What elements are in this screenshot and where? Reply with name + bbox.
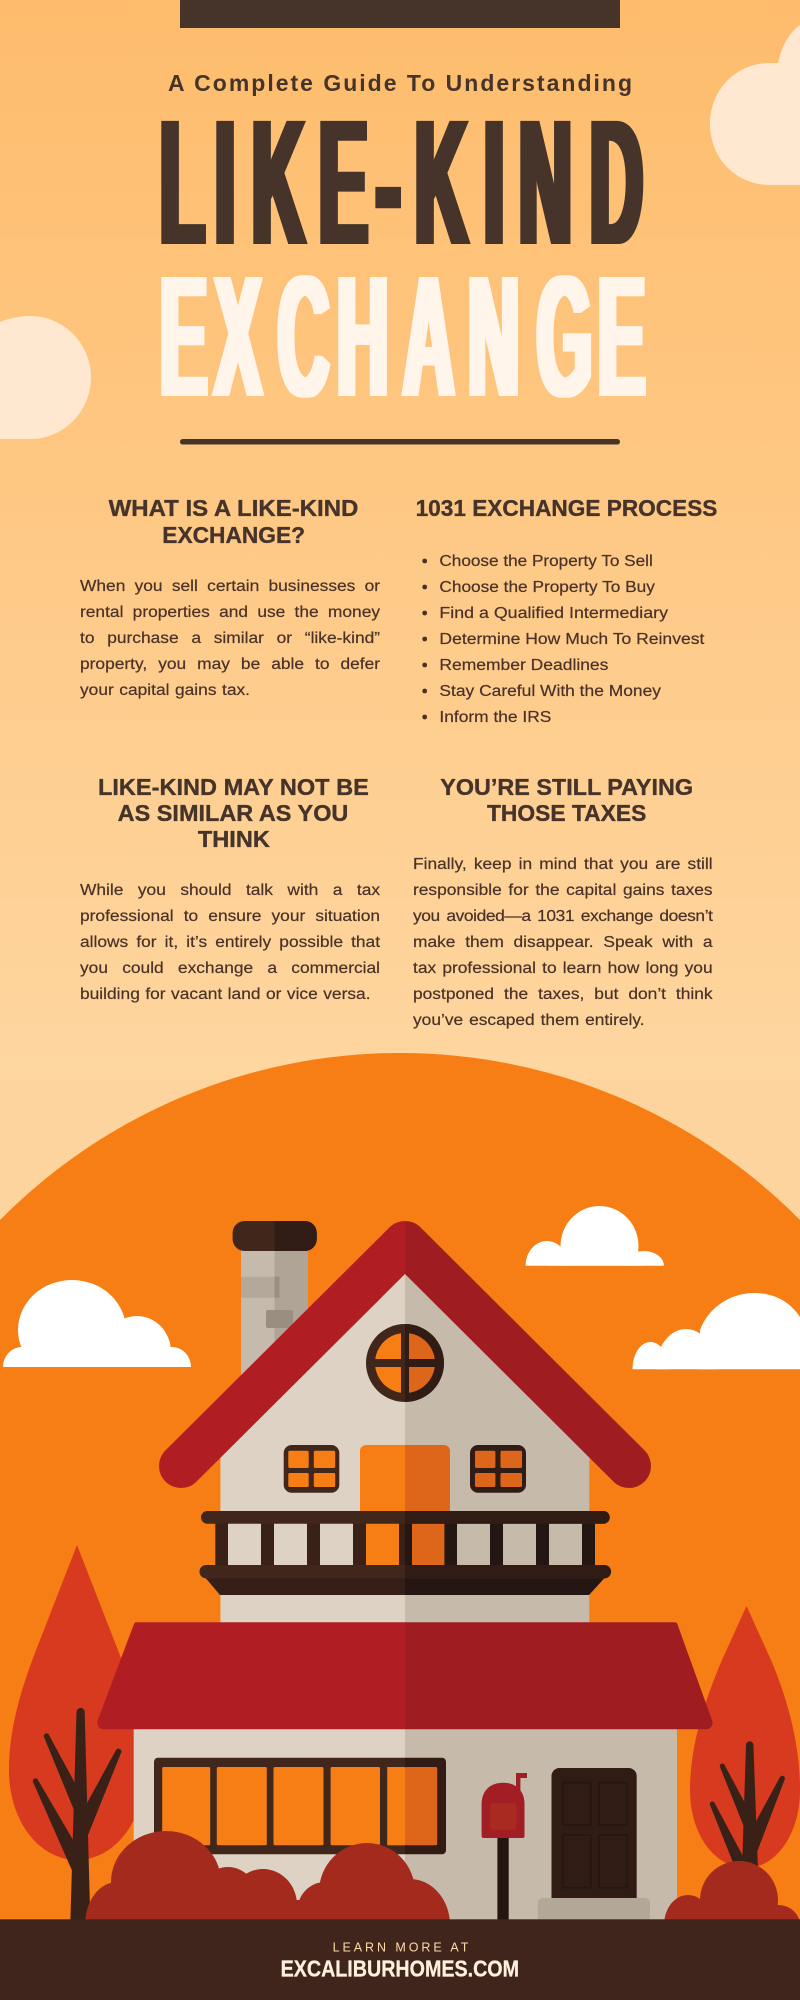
list: 1031 exchange process: Choose the Property To Buy [439, 579, 655, 596]
text block: what is a like-kind exchange: When you sell certain businesses or [80, 578, 380, 595]
lower wall [134, 1725, 677, 1920]
list: 1031 exchange process [422, 553, 705, 726]
title underline [180, 439, 620, 444]
text block: what is a like-kind exchange: property, you may be able to defer [80, 656, 380, 673]
text block: you're still paying those taxes: responsible for the capital gains taxes [413, 882, 713, 899]
footer [0, 1919, 800, 2000]
balcony [200, 1511, 611, 1595]
heading: 1031 exchange process: 1031 EXCHANGE PROCESS [416, 495, 717, 521]
list: 1031 exchange process: Remember Deadlines [439, 657, 609, 674]
top bar [180, 0, 620, 28]
background [0, 0, 800, 1080]
text block: you're still paying those taxes: you avoided—a 1031 exchange doesn’t [413, 908, 713, 925]
list: 1031 exchange process: Choose the Property To Sell [439, 553, 653, 570]
tree: right [690, 1606, 800, 1868]
heading: like-kind may not be as similar: AS SIMILAR AS YOU [118, 800, 348, 826]
mailbox [482, 1773, 527, 1920]
heading: like-kind may not be as similar [98, 774, 369, 852]
lower roof [97, 1622, 713, 1729]
text block: you're still paying those taxes [413, 856, 713, 1029]
list: 1031 exchange process: Stay Careful With the Money [439, 683, 661, 700]
text block: what is a like-kind exchange: to purchase a similar or “like-kind” [80, 630, 380, 647]
heading: what is a like-kind exchange [109, 495, 358, 548]
list: 1031 exchange process: Determine How Much To Reinvest [439, 631, 705, 648]
small window right [470, 1445, 526, 1493]
text block: what is a like-kind exchange [80, 578, 380, 699]
heading: what is a like-kind exchange: WHAT IS A LIKE-KIND [109, 495, 358, 521]
small window left [284, 1445, 339, 1493]
gable roof [181, 1243, 629, 1466]
text block: you're still paying those taxes: you’ve escaped them entirely. [413, 1012, 645, 1029]
cloud: sky top right [526, 1206, 664, 1266]
cloud: left [0, 316, 91, 439]
sun [0, 1053, 800, 1920]
left bare tree trunk [33, 1708, 121, 1920]
title: like-kind: LIKE-KIND [160, 82, 643, 282]
text block: you're still paying those taxes: postponed the taxes, but don’t think [413, 986, 713, 1003]
cloud: sky right [632, 1293, 800, 1370]
chimney [233, 1221, 317, 1385]
text block: you're still paying those taxes: tax professional to learn how long you [413, 960, 713, 977]
footer: learn more at: LEARN MORE AT [333, 1940, 469, 1954]
cloud: sky left [3, 1280, 191, 1367]
heading: you're still paying those taxes [440, 774, 693, 826]
bushes right [664, 1861, 799, 1920]
bushes left [85, 1831, 450, 1920]
text block: like-kind may not be as similar: building for vacant land or vice versa. [80, 986, 371, 1003]
heading: like-kind may not be as similar: LIKE-KIND MAY NOT BE [98, 774, 369, 800]
text block: you're still paying those taxes: Finally, keep in mind that you are still [413, 856, 713, 873]
door [552, 1768, 637, 1898]
subtitle: A Complete Guide To Understanding [168, 70, 632, 96]
text block: like-kind may not be as similar: allows for it, it’s entirely possible that [80, 934, 380, 951]
list: 1031 exchange process: Inform the IRS [439, 709, 551, 726]
text block: like-kind may not be as similar [80, 882, 380, 1003]
text block: you're still paying those taxes: make them disappear. Speak with a [413, 934, 713, 951]
cloud: top right [710, 25, 800, 185]
footer: website: EXCALIBURHOMES.COM [281, 1956, 519, 1982]
tree: left [9, 1545, 145, 1860]
upper wall [220, 1262, 589, 1625]
heading: like-kind may not be as similar: THINK [198, 826, 270, 852]
text block: like-kind may not be as similar: While you should talk with a tax [80, 882, 380, 899]
heading: you're still paying those taxes: THOSE TAXES [487, 800, 646, 826]
balcony door [360, 1445, 450, 1566]
round window [366, 1324, 444, 1402]
right bare tree trunk [710, 1741, 785, 1885]
text block: like-kind may not be as similar: professional to ensure your situation [80, 908, 380, 925]
text block: what is a like-kind exchange: your capital gains tax. [80, 682, 250, 699]
heading: what is a like-kind exchange: EXCHANGE? [162, 522, 305, 548]
door step [538, 1898, 650, 1920]
heading: you're still paying those taxes: YOU’RE STILL PAYING [440, 774, 693, 800]
large window [154, 1758, 446, 1854]
title: exchange: EXCHANGE [160, 240, 645, 434]
text block: like-kind may not be as similar: you could exchange a commercial [80, 960, 380, 977]
list: 1031 exchange process: Find a Qualified Intermediary [439, 605, 668, 622]
text block: what is a like-kind exchange: rental properties and use the money [80, 604, 380, 621]
